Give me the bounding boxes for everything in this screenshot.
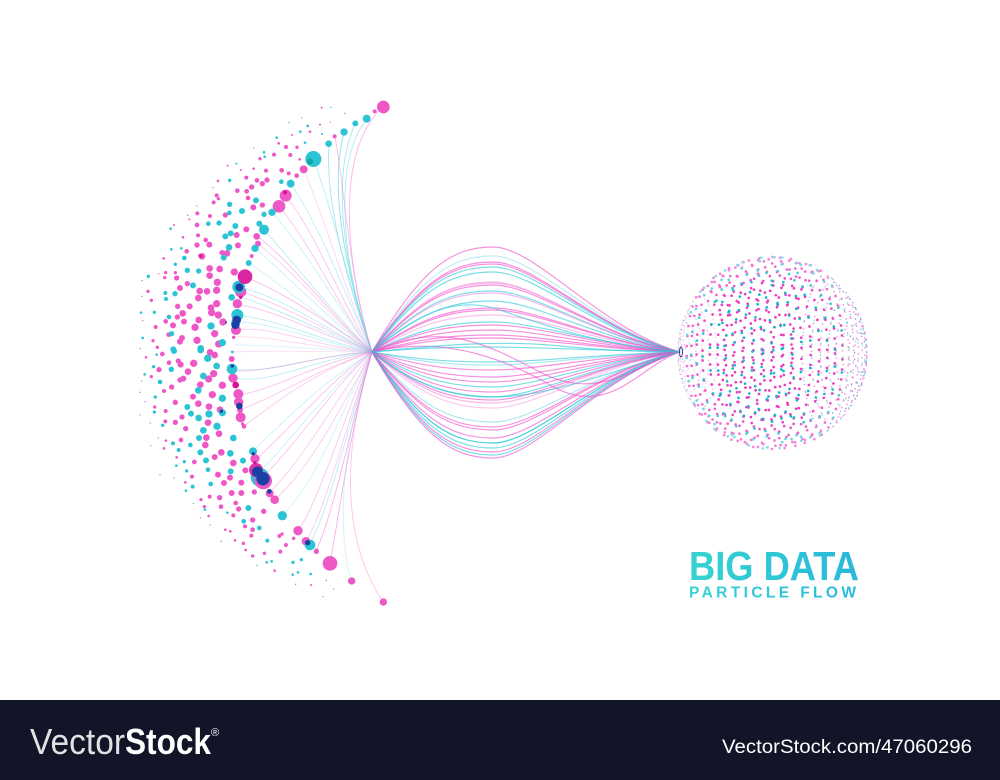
particle arc: cyan dots (upper half) — [140, 107, 370, 352]
subtitle: PARTICLE FLOW: PARTICLE FLOW — [689, 584, 856, 602]
title: BIG DATA: BIG DATA — [689, 543, 859, 589]
particle arc: magenta dots (lower half) — [140, 349, 387, 605]
central flow of bell-shaped lines — [372, 247, 680, 458]
footer logo: VectorStock: Vector — [30, 721, 125, 762]
footer logo: VectorStock — [30, 721, 219, 762]
footer url: VectorStock.com/47060296 — [722, 737, 972, 758]
particle sphere — [678, 257, 867, 449]
footer logo: VectorStock: Stock — [125, 721, 212, 762]
particle arc: overlap dots (upper half) — [199, 159, 313, 329]
particle arc: overlap dots (lower half) — [220, 364, 310, 545]
left fan of curved lines — [232, 107, 383, 602]
footer bar — [0, 700, 1000, 780]
particle arc: cyan dots (lower half) — [144, 347, 323, 597]
particle arc: magenta dots (upper half) — [140, 101, 389, 349]
footer logo: VectorStock: ® — [211, 727, 219, 739]
